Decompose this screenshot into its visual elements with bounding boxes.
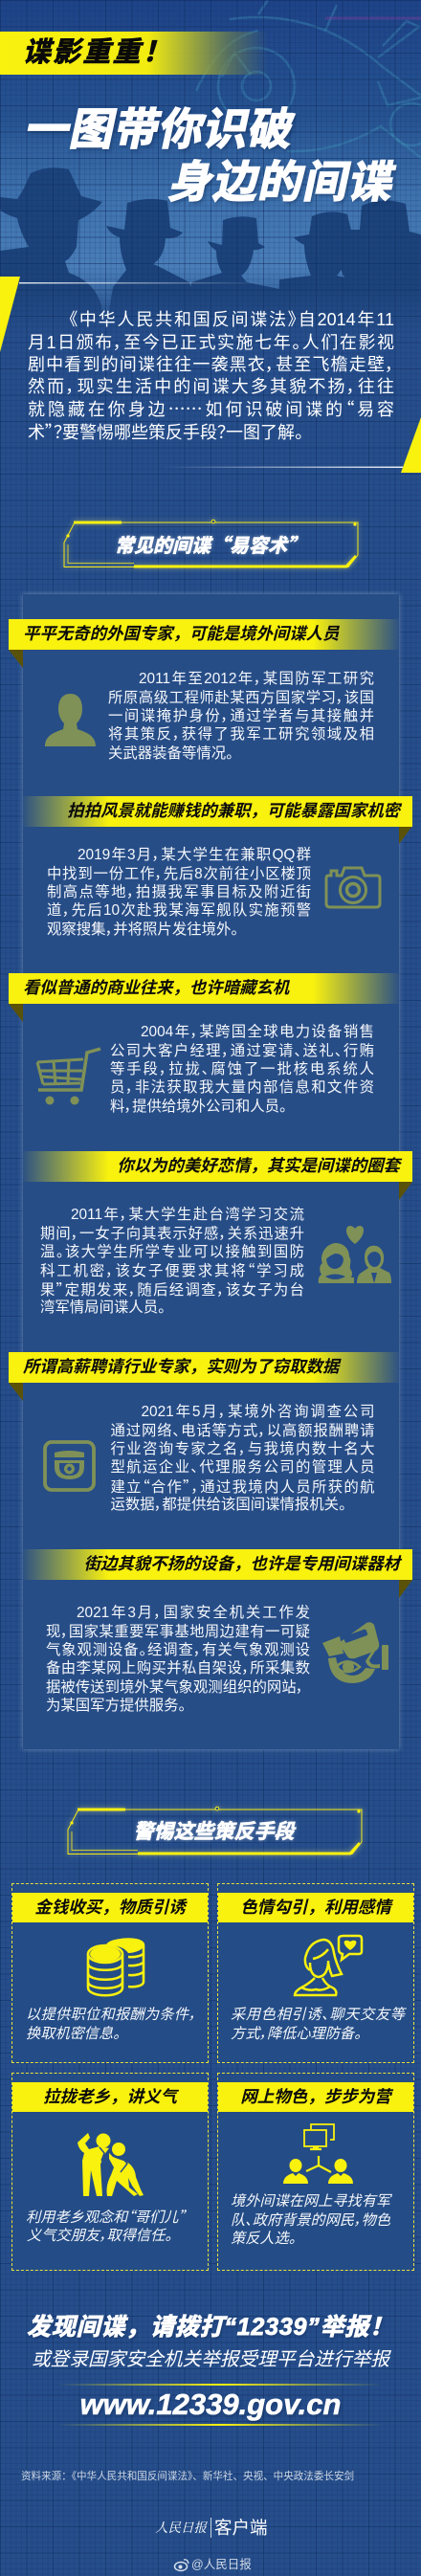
intro paragraph: 《中华人民共和国反间谍法》自2014年11: [69, 310, 394, 329]
case 3 text: 员，非法获取我大量内部信息和文件资: [110, 1079, 374, 1096]
case 4 text: 2011年，某大学生赴台湾学习交流: [71, 1207, 304, 1223]
case 6 text: 气象观测设备。经调查，有关气象观测设: [46, 1642, 310, 1658]
icon: weibo: [174, 2559, 189, 2572]
case 2 text: 制高点等地，拍摄我军事目标及附近街: [47, 884, 311, 900]
panel: common disguises: [23, 594, 399, 1749]
case 6 text: 2021年3月，国家安全机关工作发: [77, 1605, 310, 1621]
weibo handle: @人民日报: [191, 2558, 252, 2571]
title: 身边的间谍: [165, 157, 401, 207]
card: online scouting: 队、政府背景的网民，物色: [231, 2212, 390, 2228]
title: [21, 104, 401, 207]
card heading: [218, 1893, 413, 1921]
case 4 text: 温。该大学生所学专业可以接触到国防: [40, 1244, 304, 1260]
card text: 境外间谍在网上寻找有军: [231, 2193, 390, 2210]
card: money bribery: 换取机密信息。: [26, 2025, 121, 2042]
case 3 text: 料，提供给境外公司和人员。: [110, 1099, 287, 1115]
case 5 text: 通过网络、电话等方式，以高额报酬聘请: [111, 1423, 375, 1439]
section heading frame: 警惕这些策反手段: [65, 1804, 366, 1858]
icon: person: [45, 694, 96, 746]
case 2 heading: [23, 796, 412, 827]
card text: 采用色相引诱、聊天交友等: [231, 2007, 405, 2023]
card: money bribery: [11, 1883, 209, 2063]
case 3 text: 公司大客户经理，通过宴请、送礼、行贿: [110, 1043, 374, 1059]
icon: two men embracing: [78, 2133, 144, 2196]
card: honey trap: 方式，降低心理防备。: [231, 2025, 362, 2042]
case 3 text: 等手段，拉拢、腐蚀了一批核电系统人: [110, 1061, 374, 1077]
case 6 text: 为某国军方提供服务。: [46, 1698, 186, 1714]
intro paragraph: [28, 310, 394, 444]
case 6 text: 据被传送到境外某气象观测组织的网站，: [46, 1679, 303, 1696]
case 6 heading: 街边其貌不扬的设备，也许是专用间谍器材: [84, 1554, 400, 1573]
card heading: 网上物色，步步为营: [240, 2087, 391, 2106]
case 4 heading: 你以为的美好恋情，其实是间谍的圈套: [117, 1156, 400, 1175]
section heading frame: 警惕这些策反手段: 警惕这些策反手段: [134, 1821, 295, 1843]
case 1 text: 一间谍掩护身份，通过学者与其接触并: [108, 708, 374, 724]
logo: people's daily client: 人民日报: [155, 2520, 207, 2535]
case 3 text: 2004年，某跨国全球电力设备销售: [141, 1024, 374, 1040]
case 2 text: 观察搜集，并将照片发往境外。: [47, 922, 238, 938]
case 5 text: 行业咨询专家之名，与我境内数十名大: [111, 1441, 375, 1457]
case 6 text: 备由李某网上购买并私自架设，所采集数: [46, 1660, 310, 1677]
card heading: [218, 2082, 413, 2111]
case 1 text: 将其策反，获得了我军工研究领域及相: [108, 726, 374, 743]
card heading: [12, 2082, 208, 2111]
case 5 text: 运数据，都提供给该国间谍情报机关。: [111, 1497, 346, 1513]
intro paragraph: 剧中看到的间谍往往一袭黑衣，甚至飞檐走壁，: [28, 355, 394, 374]
intro frame: slashes and lines: [0, 277, 421, 473]
case 5 heading: [9, 1352, 399, 1383]
logo: people's daily client: 客户端: [214, 2518, 268, 2538]
card: online scouting: 策反人选。: [231, 2231, 296, 2247]
card heading: 拉拢老乡，讲义气: [43, 2087, 177, 2106]
case 2 text: 中找到一份工作，先后8次前往小区楼顶: [47, 866, 311, 882]
intro paragraph: 然而，现实生活中的间谍大多其貌不扬，往往: [28, 377, 394, 396]
case 2 text: [47, 846, 311, 938]
report platform line: 或登录国家安全机关举报受理平台进行举报: [32, 2349, 389, 2370]
card: honey trap: [217, 1883, 414, 2063]
section heading frame: 常见的间谍易容术: 常见的间谍“易容术”: [115, 530, 306, 558]
case 1 text: 所原高级工程师赴某西方国家学习，该国: [108, 690, 374, 706]
card: online scouting: [217, 2073, 414, 2271]
card: hometown ties: 义气交朋友，取得信任。: [27, 2228, 172, 2243]
card heading: [12, 1893, 208, 1921]
card heading: 金钱收买，物质引诱: [34, 1898, 186, 1917]
case 4 text: 果”定期发来，随后经调查，该女子为台: [40, 1278, 304, 1299]
card heading: 色情勾引，利用感情: [240, 1898, 391, 1917]
case 1 text: 关武器装备等情况。: [108, 745, 233, 762]
case 5 heading: 所谓高薪聘请行业专家，实则为了窃取数据: [23, 1357, 339, 1376]
intro paragraph: 术”？要警惕哪些策反手段？一图了解。: [28, 419, 303, 444]
yellow banner: 谍影重重: [0, 32, 268, 75]
case 1 heading: 平平无奇的外国专家，可能是境外间谍人员: [23, 624, 339, 643]
case 2 text: 道，先后10次赴我某海军舰队实施预警: [47, 902, 311, 919]
icon: woman with heart bubble: [293, 1935, 364, 1996]
icon: couple with heart: [318, 1226, 391, 1283]
card text: 以提供职位和报酬为条件，: [26, 2007, 196, 2023]
case 4 heading: [23, 1151, 412, 1182]
case 4 text: 湾军情局间谍人员。: [40, 1299, 166, 1316]
icon: coin stacks: [86, 1938, 145, 1996]
icon: dome camera: [43, 1440, 96, 1492]
card: hometown ties: [11, 2073, 209, 2271]
case 6 text: [46, 1604, 310, 1714]
hero background with eye and silhouettes: [0, 0, 421, 314]
intro paragraph: 就隐藏在你身边……如何识破间谍的“易容: [28, 396, 394, 421]
card text: 利用老乡观念和“哥们儿”: [26, 2206, 186, 2227]
yellow banner: 谍影重重: 谍影重重！: [21, 37, 179, 68]
case 1 heading: [9, 619, 399, 650]
case 3 heading: 看似普通的商业往来，也许暗藏玄机: [23, 978, 289, 997]
case 4 text: 科工机密，该女子便要求其将“学习成: [40, 1259, 304, 1280]
case 2 text: 2019年3月，某大学生在兼职QQ群: [78, 847, 311, 863]
icon: surveillance camera with eye: [322, 1622, 388, 1683]
section heading frame: 常见的间谍易容术: [61, 517, 362, 572]
title: 一图带你识破: [21, 104, 299, 154]
case 4 text: [40, 1206, 304, 1316]
case 5 text: 建立“合作”，通过我境内人员所获的航: [111, 1476, 374, 1497]
case 3 text: [110, 1024, 374, 1115]
case 1 text: [108, 670, 374, 762]
icon: camera: [325, 867, 381, 909]
case 6 heading: [23, 1549, 412, 1580]
case 5 text: 2021年5月，某境外咨询调查公司: [142, 1404, 375, 1420]
case 3 heading: [9, 973, 399, 1004]
case 6 text: 现，国家某重要军事基地周边建有一可疑: [46, 1624, 310, 1640]
case 5 text: [111, 1403, 375, 1513]
fold triangles: [9, 650, 412, 1598]
intro paragraph: 月1日颁布，至今已正式实施七年。人们在影视: [28, 333, 394, 352]
case 5 text: 型航运企业、代理服务公司的管理人员: [111, 1459, 375, 1476]
case 4 text: 期间，一女子向其表示好感，关系迅速升: [40, 1226, 304, 1242]
call to action: 发现间谍，请拨打“12339”举报！: [27, 2314, 394, 2341]
logo: people's daily client: [155, 2518, 268, 2538]
case 2 heading: 拍拍风景就能赚钱的兼职，可能暴露国家机密: [67, 801, 400, 820]
icon: monitors and two people: [283, 2123, 353, 2184]
case 1 text: 2011年至2012年，某国防军工研究: [139, 671, 374, 687]
website with rules: www.12339.gov.cn: [80, 2387, 341, 2421]
icon: shopping cart: [36, 1047, 101, 1104]
source note: 资料来源：《中华人民共和国反间谍法》、新华社、央视、中央政法委长安剑: [21, 2471, 354, 2482]
